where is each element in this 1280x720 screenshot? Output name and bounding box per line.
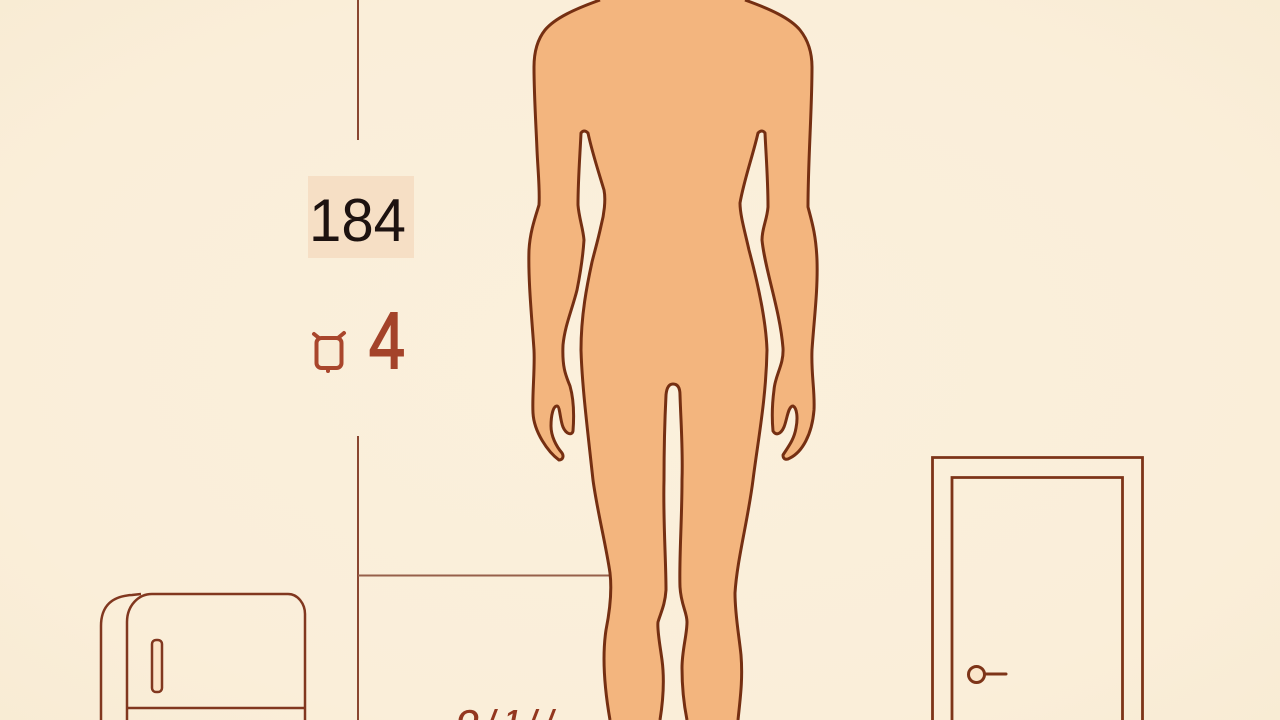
height value badge: 184 bbox=[309, 187, 406, 254]
door outline bbox=[932, 458, 1142, 720]
human body silhouette bbox=[529, 0, 817, 720]
icon: small bug-like marker bbox=[314, 333, 344, 371]
height measurement line bbox=[358, 0, 610, 720]
door handle bbox=[968, 666, 1006, 682]
refrigerator outline bbox=[101, 594, 305, 720]
secondary number: 4 bbox=[369, 296, 405, 385]
refrigerator handle bbox=[152, 640, 162, 692]
